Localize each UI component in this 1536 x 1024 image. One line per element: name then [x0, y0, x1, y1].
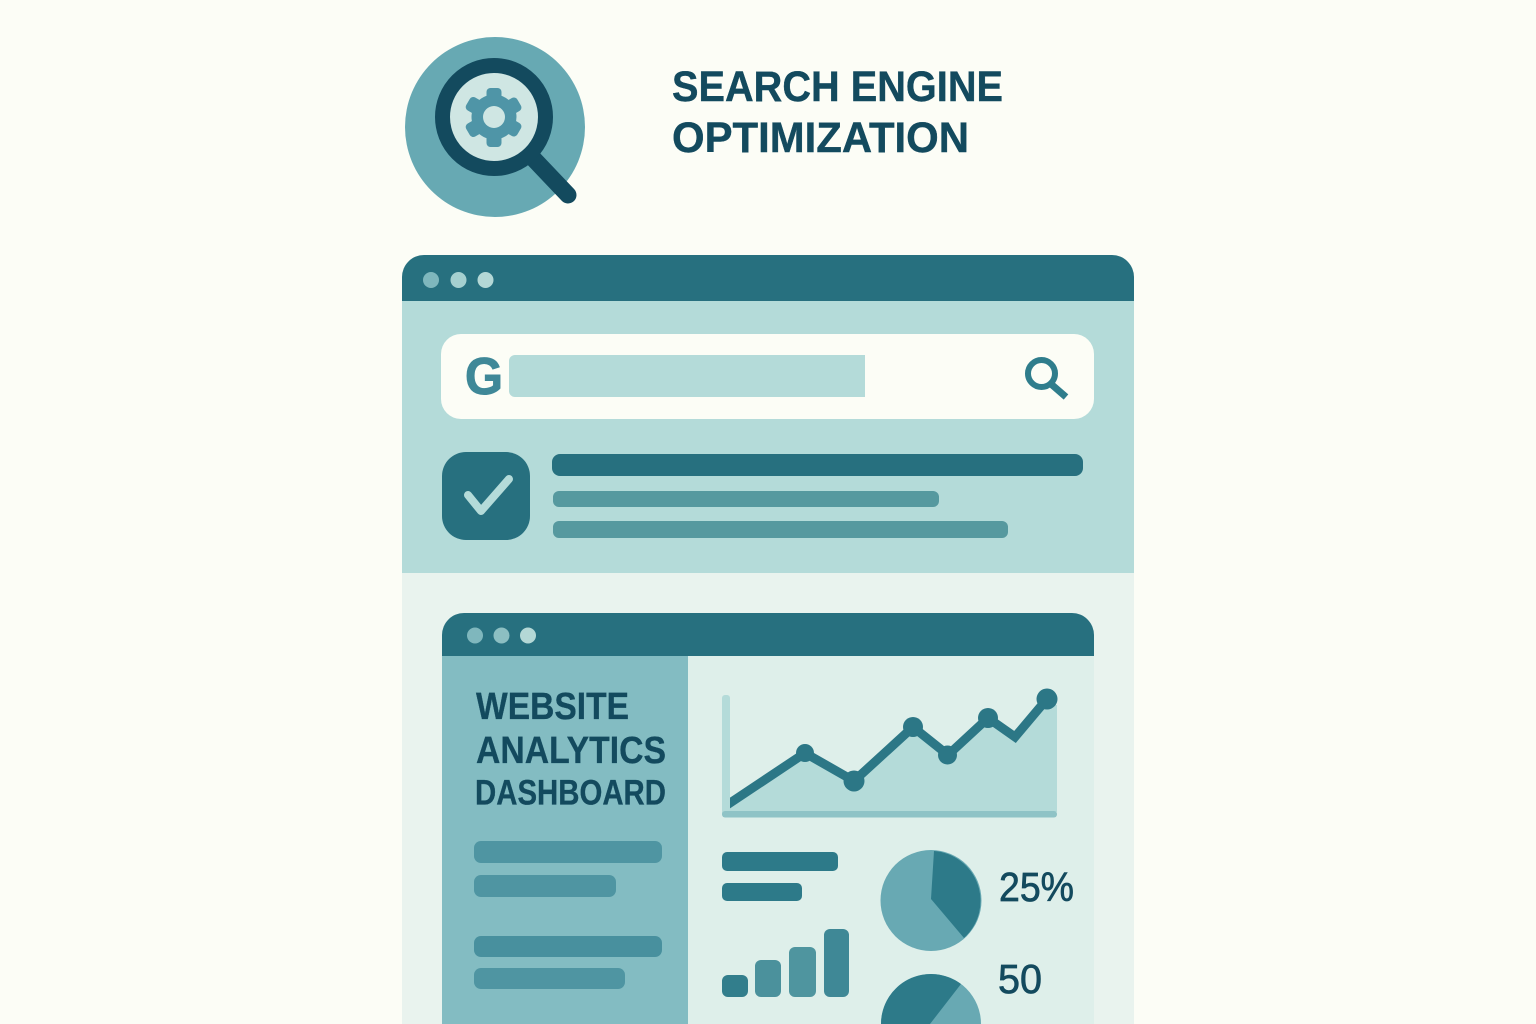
panel: browser window	[402, 255, 1134, 1024]
title: SEARCH ENGINE	[672, 63, 1003, 111]
result description bar 2	[553, 521, 1008, 538]
title	[672, 63, 1003, 162]
title: OPTIMIZATION	[672, 114, 969, 162]
result description bar 1	[553, 491, 939, 507]
stat: 50: 50	[998, 956, 1042, 1002]
sidebar bars	[474, 841, 662, 989]
panel: analytics dashboard	[442, 613, 1094, 1024]
dashboard heading	[475, 686, 666, 812]
icon: magnifying glass with gear	[405, 37, 585, 217]
dashboard title bar	[442, 613, 1094, 656]
search bar	[441, 334, 1094, 419]
browser window dots	[423, 272, 494, 288]
pie chart 1	[880, 850, 982, 951]
browser lower body	[402, 560, 1134, 1024]
dashboard window dots	[467, 628, 536, 644]
gear	[464, 88, 523, 147]
magnifier lens	[442, 66, 546, 168]
browser title bar	[402, 255, 1134, 301]
icon: checkmark	[442, 452, 530, 540]
logo background circle	[405, 37, 585, 217]
search input field	[509, 355, 865, 397]
dashboard heading: DASHBOARD	[475, 774, 666, 812]
icon: search magnifier	[1028, 360, 1066, 397]
legend bars	[722, 852, 838, 901]
dashboard heading: ANALYTICS	[476, 730, 666, 772]
browser search results area	[402, 295, 1134, 573]
line chart	[715, 688, 1058, 818]
result title bar	[552, 454, 1083, 476]
panel: dashboard sidebar	[442, 650, 688, 1024]
stat: 25%: 25%	[999, 864, 1074, 910]
pie chart 2	[881, 974, 981, 1024]
search result item	[442, 452, 1083, 540]
dashboard heading: WEBSITE	[476, 686, 629, 728]
magnifier handle	[530, 155, 568, 195]
dashboard main area	[688, 650, 1094, 1024]
bar chart	[722, 929, 849, 997]
icon: G logo: G	[465, 348, 503, 406]
